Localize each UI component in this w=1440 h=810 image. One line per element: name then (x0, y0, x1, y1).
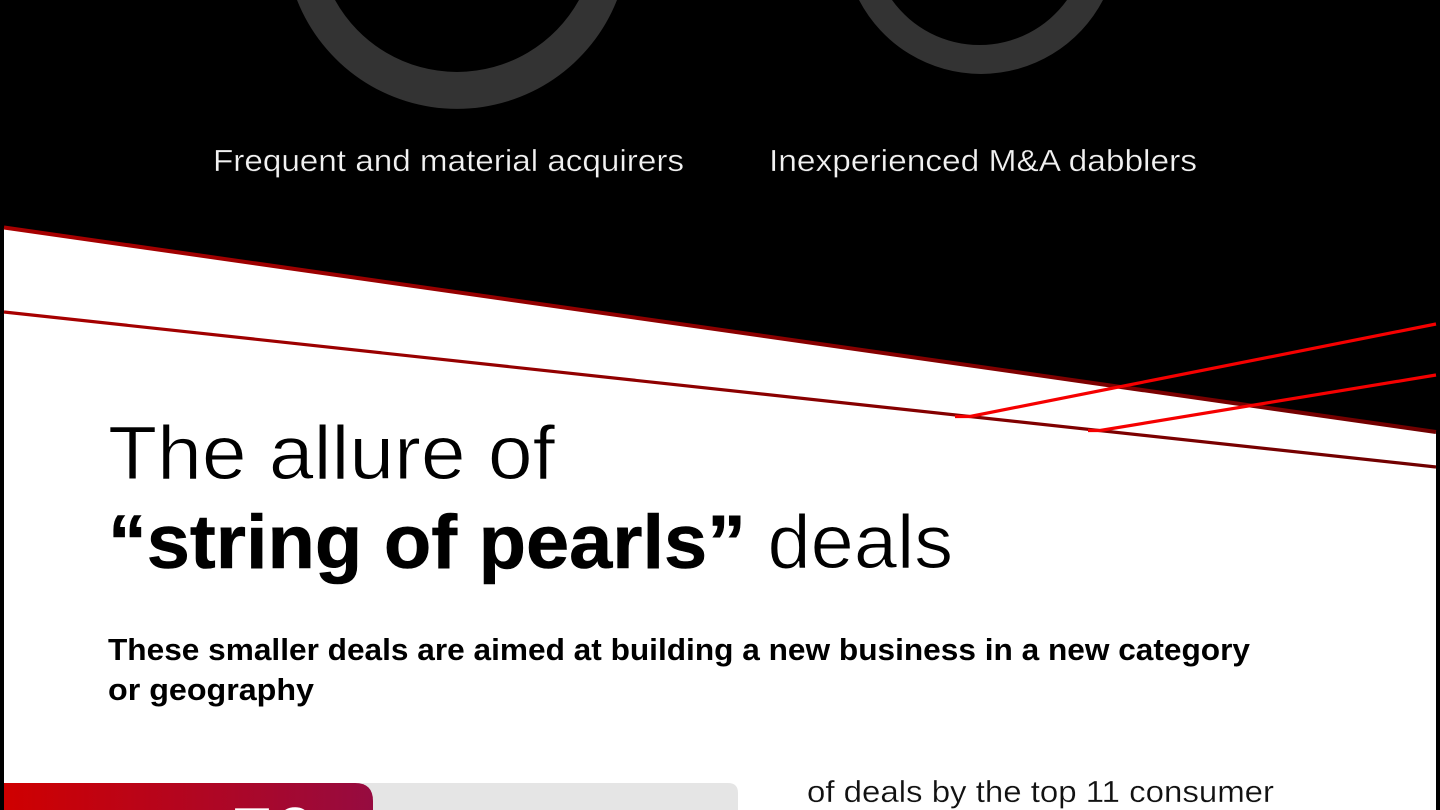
text block: frequent and material acquirers label: Frequent and material acquirers (213, 143, 684, 178)
chart: frequent acquirers ring (297, 0, 617, 109)
chart: dabblers ring (859, 0, 1103, 74)
text block: deals description: of deals by the top 11 consumer (807, 774, 1274, 809)
title: “string of pearls” deals (108, 500, 953, 585)
subtitle: These smaller deals are aimed at building a new business in a new category (108, 632, 1251, 667)
title: The allure of (108, 411, 556, 496)
bar chart: share of deals (4, 783, 738, 810)
title (108, 411, 953, 585)
diagonal dark red lines (4, 228, 1436, 467)
subtitle: or geography (108, 672, 315, 707)
text block: inexperienced M&A dabblers label: Inexperienced M&A dabblers (769, 143, 1197, 178)
bright red lines (955, 324, 1436, 430)
subtitle (108, 632, 1251, 707)
